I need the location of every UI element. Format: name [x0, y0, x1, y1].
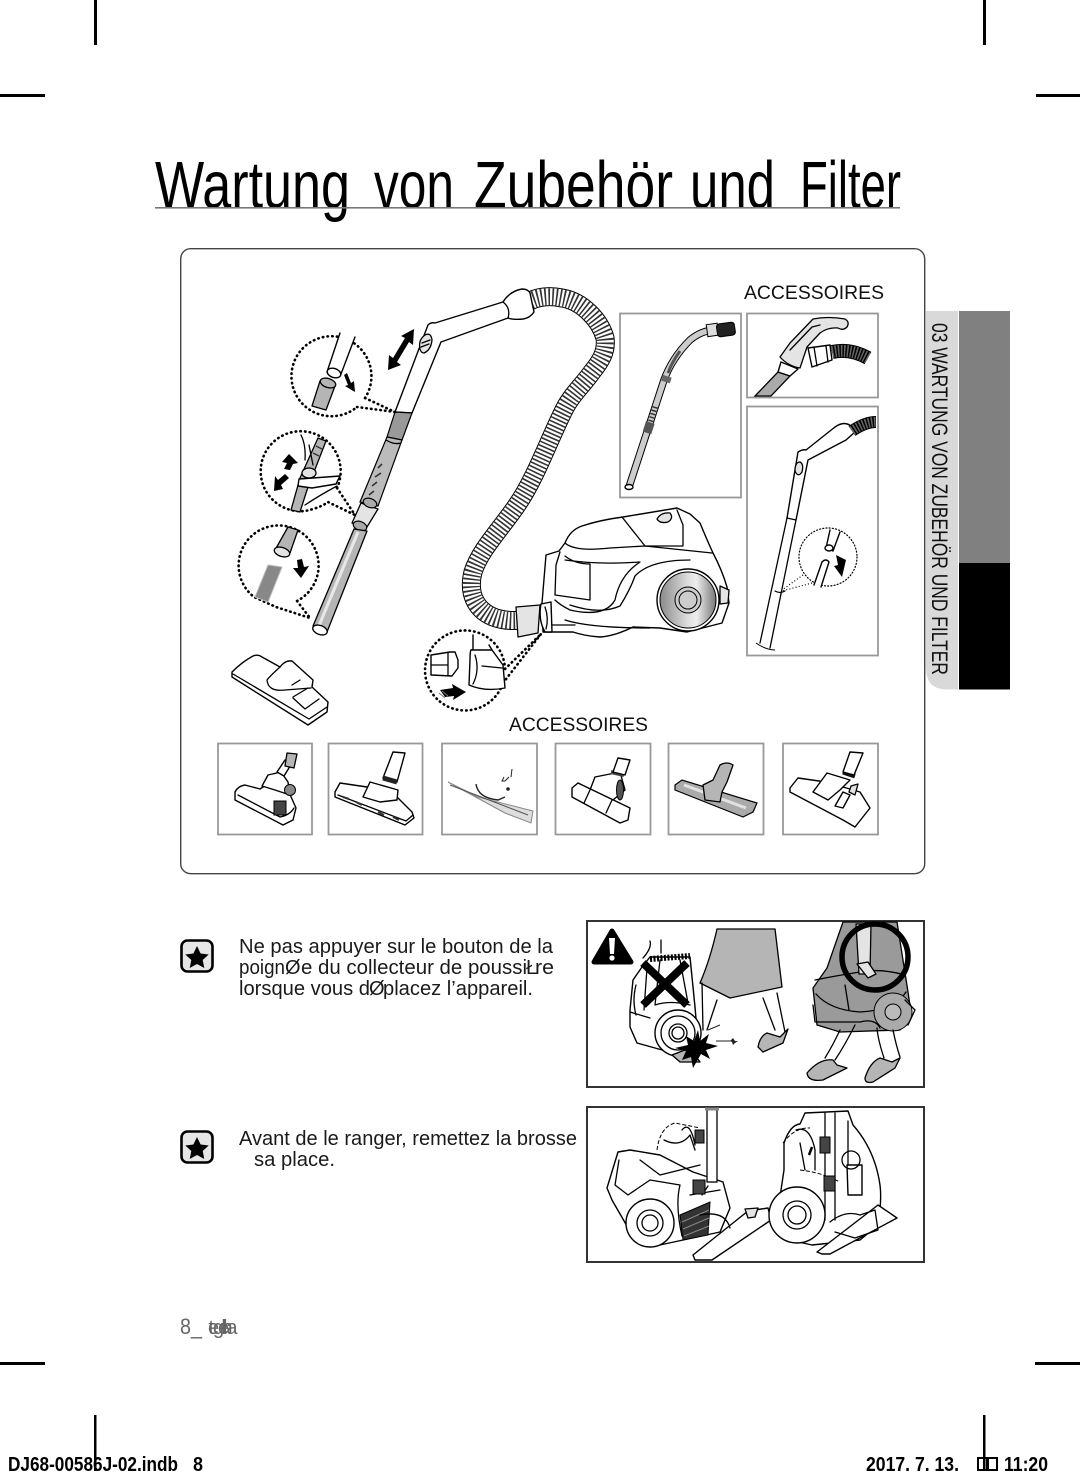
note text 2 [239, 1128, 577, 1171]
note text 1: Ł [526, 957, 537, 979]
hose [471, 297, 605, 621]
footer: date and time: 11:20 [1004, 1454, 1048, 1476]
note text 1: e du collecteur de poussi [301, 957, 527, 979]
title: und [690, 148, 775, 223]
panel: accessories diagram [181, 249, 925, 874]
note text 1: poign [239, 957, 285, 979]
label: accessories top: ACCESSOIRES [744, 283, 884, 304]
box: wand side view [747, 406, 878, 656]
vacuum cleaner [516, 508, 729, 637]
box: handle with button [747, 314, 878, 398]
note text 1: Ø [285, 957, 301, 979]
walking person [672, 929, 788, 1062]
title: Zubehör [474, 148, 673, 223]
note icon 2 [182, 1132, 212, 1162]
footer: file name: DJ68-00586J-02.indb [8, 1454, 178, 1476]
impact burst [675, 1030, 718, 1068]
page number [180, 1314, 238, 1339]
title: Filter [800, 148, 901, 223]
floor nozzle [232, 655, 328, 725]
illustration: storing the brush [587, 1107, 924, 1262]
arrow: double-headed length [388, 329, 414, 370]
title: Wartung [155, 148, 350, 223]
cross mark [643, 963, 687, 1005]
note text 1: lorsque vous d [239, 978, 370, 1000]
note text 2: Avant de le ranger, remettez la brosse [239, 1128, 577, 1150]
title: von [374, 148, 454, 223]
note text 1: Ø [369, 978, 385, 1000]
note icon 1 [182, 940, 212, 972]
page number: 8_ [180, 1314, 203, 1339]
note text 2: sa place. [254, 1149, 335, 1171]
title [155, 148, 901, 223]
note text 1: Ne pas appuyer sur le bouton de la [239, 936, 554, 958]
page number: tegelha [208, 1317, 238, 1339]
footer: date and time: 2017. 7. 13. [866, 1454, 959, 1476]
illustration: carrying warning [587, 921, 924, 1087]
zoom circle: tube end [239, 525, 319, 618]
zoom circle: hose connection [425, 630, 541, 710]
vacuum held incorrectly [630, 940, 701, 1056]
brush 1: turbo brush [218, 744, 312, 834]
brush 5: flat floor nozzle [668, 744, 764, 834]
zoom circle: length button [261, 431, 355, 515]
vacuum with parked nozzle, side view [607, 1108, 771, 1260]
footer: file name: 8 [193, 1454, 203, 1476]
person carrying correctly [807, 922, 915, 1082]
zoom circle: tube joint [291, 333, 395, 416]
wand with handle [311, 289, 534, 637]
box: hose with wand [620, 314, 741, 498]
sidebar tab: 03 WARTUNG VON ZUBEHÖR UND FILTER [927, 323, 952, 675]
brush 3: thin blade tool [442, 744, 537, 834]
icon: warning triangle [594, 931, 631, 962]
vacuum with parked nozzle, upright view [769, 1111, 897, 1254]
brush 6: combination nozzle [783, 744, 878, 834]
brush 4: mini turbo brush [556, 744, 650, 834]
sidebar tab [926, 311, 1010, 690]
label: accessories bottom: ACCESSOIRES [509, 715, 648, 736]
note text 1: re [535, 957, 554, 979]
brush 2: carpet floor brush [328, 744, 422, 834]
note text 1: placez l’appareil. [383, 978, 533, 1000]
footer: date and time [866, 1454, 1048, 1476]
note text 1 [239, 936, 554, 1000]
